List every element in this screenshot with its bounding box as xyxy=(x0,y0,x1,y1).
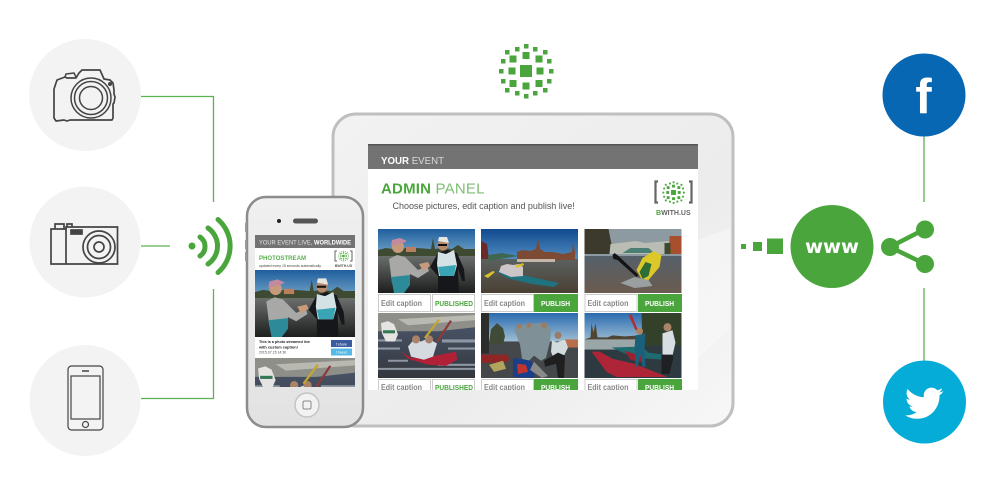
phone share buttons xyxy=(331,340,352,356)
logo mark: bwith.us xyxy=(499,44,554,98)
photo card 6: Edit caption xyxy=(588,383,629,392)
photo card 1: PUBLISHED xyxy=(435,299,474,308)
photo card 5 xyxy=(481,313,578,397)
tablet header bar: YOUR EVENT xyxy=(381,156,444,167)
bwith.us logo small: BWITH.US xyxy=(656,210,691,217)
phone header bar: YOUR EVENT LIVE, WORLDWIDE xyxy=(259,240,351,246)
www circle: www xyxy=(805,235,859,258)
photo card 3: Edit caption xyxy=(588,299,629,308)
icon circle: smartphone xyxy=(30,345,140,456)
phone share buttons: t tweet xyxy=(336,350,347,354)
photo card 6 xyxy=(584,313,682,397)
photostream heading xyxy=(259,255,321,268)
photo card 5: PUBLISH xyxy=(541,383,570,392)
connector lines: sources to wifi xyxy=(141,96,214,398)
photo card 2: Edit caption xyxy=(484,299,525,308)
photo card 2 xyxy=(481,229,578,312)
www circle xyxy=(790,205,874,288)
phone share buttons: f share xyxy=(336,342,347,346)
connector lines: share to social xyxy=(923,136,925,362)
dotted squares connector xyxy=(741,238,783,254)
tablet device xyxy=(333,114,733,426)
smartphone device xyxy=(245,197,363,427)
photo card 1 xyxy=(378,229,475,312)
phone home button xyxy=(295,393,319,417)
phone caption xyxy=(258,339,311,354)
photo card 4: PUBLISHED xyxy=(435,383,474,392)
facebook circle: f xyxy=(915,70,932,124)
facebook circle xyxy=(882,54,966,136)
photo card 4: Edit caption xyxy=(381,383,422,392)
photo card 6: PUBLISH xyxy=(645,383,674,392)
phone second photo xyxy=(255,358,355,387)
photo card 3: PUBLISH xyxy=(645,299,674,308)
icon: share xyxy=(881,220,934,273)
phone photo xyxy=(255,270,355,337)
photo card 5: Edit caption xyxy=(484,383,525,392)
icon circle: compact camera xyxy=(30,186,140,298)
phone bwith.us logo xyxy=(335,251,353,268)
phone caption: 2015.07.15 14:30 xyxy=(259,350,286,354)
phone caption: This is a photo streamed live xyxy=(259,339,311,344)
twitter circle xyxy=(883,360,966,444)
photostream heading: PHOTOSTREAM xyxy=(259,255,306,262)
icon: wifi signal xyxy=(188,220,230,272)
admin panel subheading: Choose pictures, edit caption and publish live! xyxy=(392,201,575,211)
tablet header bar xyxy=(368,144,698,169)
bwith.us logo small xyxy=(656,181,692,217)
phone header bar xyxy=(255,235,355,248)
phone caption: with custom caption! xyxy=(258,344,298,350)
admin panel heading: ADMIN PANEL xyxy=(381,180,485,198)
photo card 4 xyxy=(378,313,475,396)
photo card 1: Edit caption xyxy=(381,299,422,308)
photo card 3 xyxy=(584,229,682,312)
photostream heading: updated every 15 seconds automatically xyxy=(259,264,321,268)
phone bwith.us logo: BWITH.US xyxy=(335,264,353,268)
photo card 2: PUBLISH xyxy=(541,299,570,308)
icon circle: DSLR camera xyxy=(29,39,141,151)
